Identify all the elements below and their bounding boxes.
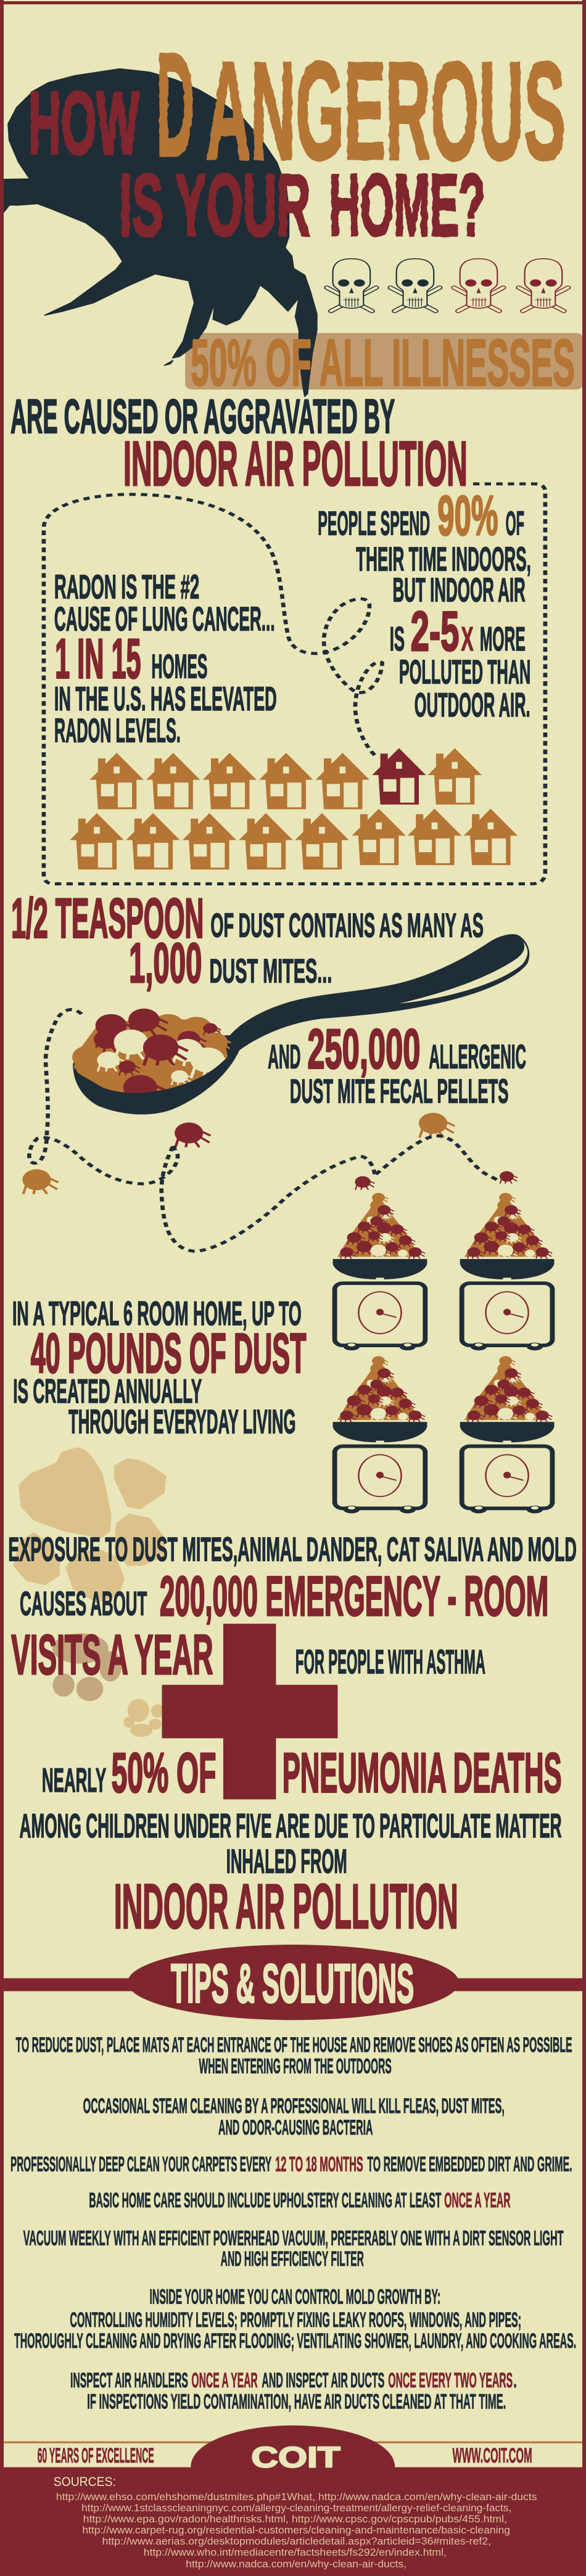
panel: footer <box>0 2426 586 2576</box>
dashed trail three <box>376 1136 498 1180</box>
text: radon: 1 IN 15 <box>55 627 141 690</box>
text: people spend 90 percent <box>318 484 531 724</box>
text: radon <box>54 568 277 749</box>
panel: sources <box>54 2474 537 2570</box>
icon: scale with dust pile 3 <box>333 1356 427 1513</box>
icon: mite small red <box>355 1176 374 1190</box>
title: D <box>156 23 194 187</box>
text: radon: RADON IS THE #2 <box>54 568 199 605</box>
icon: scale with dust pile 1 <box>333 1193 427 1350</box>
tip: air ducts: INSPECT AIR HANDLERS <box>70 2368 188 2392</box>
divider: orange footer line <box>4 2442 583 2443</box>
50 percent band <box>185 333 584 390</box>
title: HOW <box>28 74 139 173</box>
icon: scale with dust pile 4 <box>460 1356 554 1513</box>
icon: scale with dust pile 2 <box>460 1193 554 1350</box>
tip: air ducts <box>70 2368 517 2413</box>
text: 250,000 pellets <box>268 1017 526 1110</box>
icon: small brown paw print <box>52 1633 122 1701</box>
text: half teaspoon <box>11 887 484 994</box>
panel: sources: SOURCES: <box>54 2474 116 2489</box>
panel: footer: 60 YEARS OF EXCELLENCE <box>38 2443 154 2467</box>
icon: mite orange left <box>22 1169 59 1194</box>
icon: mite small red right <box>500 1171 518 1184</box>
panel: sources: http://www.nadca.com/en/why-clean-air-ducts, <box>186 2559 406 2570</box>
text: pneumonia deaths: NEARLY <box>42 1761 106 1799</box>
banner: tips and solutions <box>0 1945 586 2020</box>
panel: title header <box>0 23 584 443</box>
icon: mite orange right <box>419 1113 455 1138</box>
text: 250,000 pellets: AND <box>268 1038 300 1075</box>
text: . <box>513 2368 517 2392</box>
text: half teaspoon: 1/2 TEASPOON <box>11 887 204 950</box>
text: radon: RADON LEVELS. <box>54 712 181 749</box>
text: exposure and emergency room visits: VISITS A YEAR <box>11 1623 213 1686</box>
tip: reduce dust <box>15 2033 572 2078</box>
panel: pneumonia deaths and tips <box>0 1741 586 2139</box>
text: pneumonia deaths <box>20 1741 562 1880</box>
tip: mold <box>14 2284 576 2352</box>
icon: small tan paw print <box>123 1699 165 1737</box>
icon: mites in spoon <box>72 1009 231 1093</box>
icon: row of houses <box>70 748 518 869</box>
icon: skulls <box>327 259 568 311</box>
tip: carpets: 12 TO 18 MONTHS <box>275 2152 363 2176</box>
tip: vacuum <box>23 2226 564 2271</box>
icon: spoon <box>73 934 529 1114</box>
text: forty pounds of dust <box>12 1295 307 1440</box>
text: people spend 90 percent: 2-5 <box>411 600 459 662</box>
text: exposure and emergency room visits <box>8 1530 577 1686</box>
panel: indoor air pollution <box>44 429 545 884</box>
text: exposure and emergency room visits: CAUSES ABOUT <box>20 1585 147 1622</box>
text: forty pounds of dust: IS CREATED ANNUALLY <box>13 1372 202 1410</box>
icon: red cross <box>162 1623 337 1799</box>
text: pneumonia deaths: 50% OF <box>112 1741 216 1804</box>
tip: air ducts: ONCE A YEAR <box>191 2368 258 2392</box>
tick silhouette <box>0 69 316 396</box>
icon: mite red centre <box>175 1123 210 1147</box>
panel: sources: http://www.who.int/mediacentre/factsheets/fs292/en/index.html, <box>144 2547 447 2558</box>
text: 250,000 pellets: 250,000 <box>307 1017 420 1080</box>
tip: steam cleaning <box>83 2094 505 2139</box>
dashed trail two <box>162 1147 375 1251</box>
title <box>28 23 566 254</box>
text: radon: HOMES <box>152 647 207 685</box>
text: pneumonia deaths: INHALED FROM <box>226 1842 347 1880</box>
text: half teaspoon: 1,000 <box>129 932 202 994</box>
dashed trail one <box>29 1010 178 1184</box>
panel: footer: COIT <box>251 2442 340 2474</box>
panel: forty pounds of dust and asthma <box>8 1295 577 1799</box>
panel: dust mites <box>11 887 554 1513</box>
text: half teaspoon: DUST MITES... <box>209 952 332 990</box>
icon: large paw print <box>13 1448 167 1603</box>
text: people spend 90 percent: 90% <box>437 484 498 547</box>
text: people spend 90 percent: IS <box>390 620 405 658</box>
panel: indoor air pollution: OF <box>506 504 524 542</box>
dashed path around panel <box>44 484 545 884</box>
text: people spend 90 percent: X <box>461 620 474 658</box>
